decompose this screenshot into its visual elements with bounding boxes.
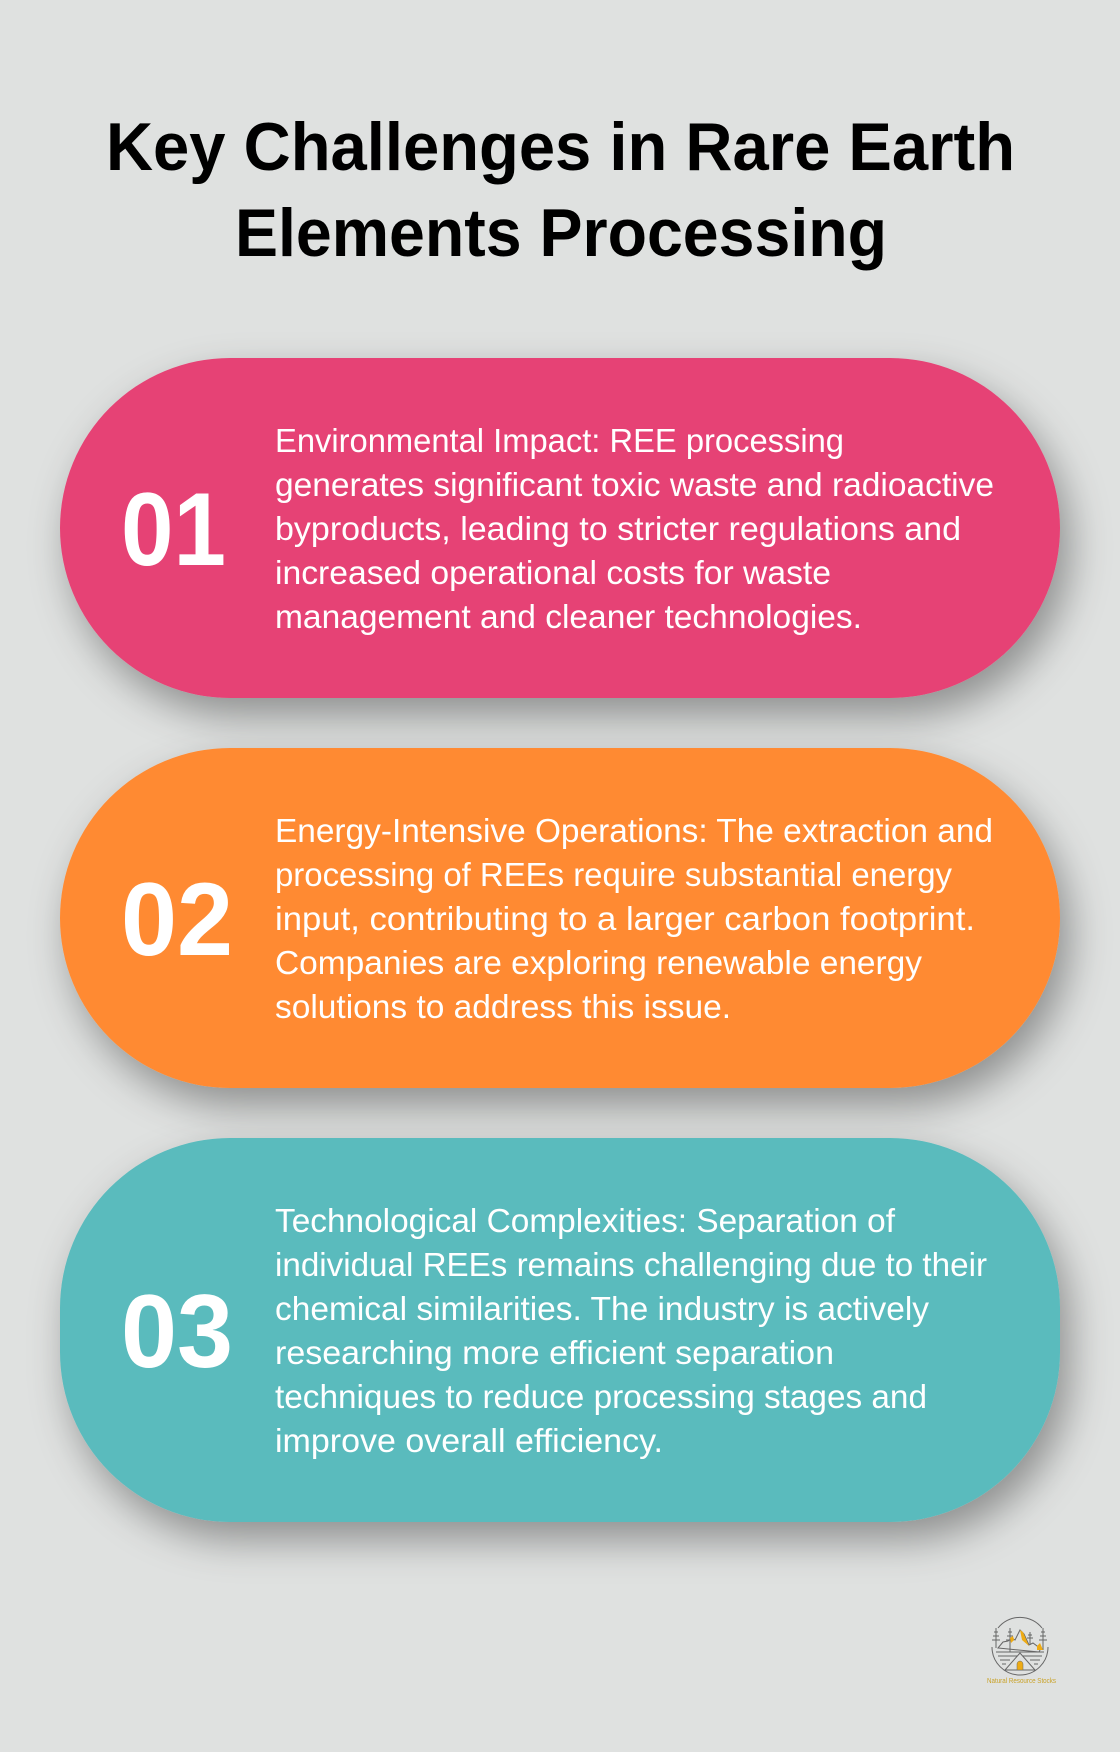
title: Elements Processing <box>235 195 887 271</box>
number 03: 03 <box>121 1274 233 1390</box>
body text <box>275 1202 987 1459</box>
title: Key Challenges in Rare Earth <box>106 109 1015 185</box>
body text <box>275 422 994 635</box>
brand name: Natural Resource Stocks <box>987 1678 1056 1685</box>
body text <box>275 812 993 1025</box>
body text: techniques to reduce processing stages and <box>275 1378 927 1415</box>
pill background <box>60 1138 1060 1522</box>
body text: solutions to address this issue. <box>275 988 731 1025</box>
body text: chemical similarities. The industry is actively <box>275 1290 930 1327</box>
number 02: 02 <box>121 862 233 978</box>
panel: 03 technological complexities <box>60 1138 1060 1522</box>
body text: Environmental Impact: REE processing <box>275 422 844 459</box>
pill background <box>60 748 1060 1088</box>
icon: circle badge with mountains, trees and tent <box>992 1617 1048 1675</box>
logo: Natural Resource Stocks <box>987 1617 1056 1685</box>
body text: generates significant toxic waste and radioactive <box>275 466 994 503</box>
pill background <box>60 358 1060 698</box>
number 01: 01 <box>121 472 226 588</box>
body text: management and cleaner technologies. <box>275 598 862 635</box>
body text: individual REEs remains challenging due to their <box>275 1246 987 1283</box>
body text: Energy-Intensive Operations: The extraction and <box>275 812 993 849</box>
body text: Companies are exploring renewable energy <box>275 944 922 981</box>
body text: input, contributing to a larger carbon footprint. <box>275 900 975 937</box>
body text: improve overall efficiency. <box>275 1422 663 1459</box>
panel: 02 energy-intensive operations <box>60 748 1060 1088</box>
title <box>106 109 1015 271</box>
icon: tent door <box>1017 1661 1023 1670</box>
body text: byproducts, leading to stricter regulations and <box>275 510 961 547</box>
body text: increased operational costs for waste <box>275 554 831 591</box>
body text: processing of REEs require substantial energy <box>275 856 952 893</box>
icon: mountain highlights <box>1010 1630 1043 1650</box>
body text: Technological Complexities: Separation of <box>275 1202 896 1239</box>
panel: 01 environmental impact <box>60 358 1060 698</box>
body text: researching more efficient separation <box>275 1334 834 1371</box>
